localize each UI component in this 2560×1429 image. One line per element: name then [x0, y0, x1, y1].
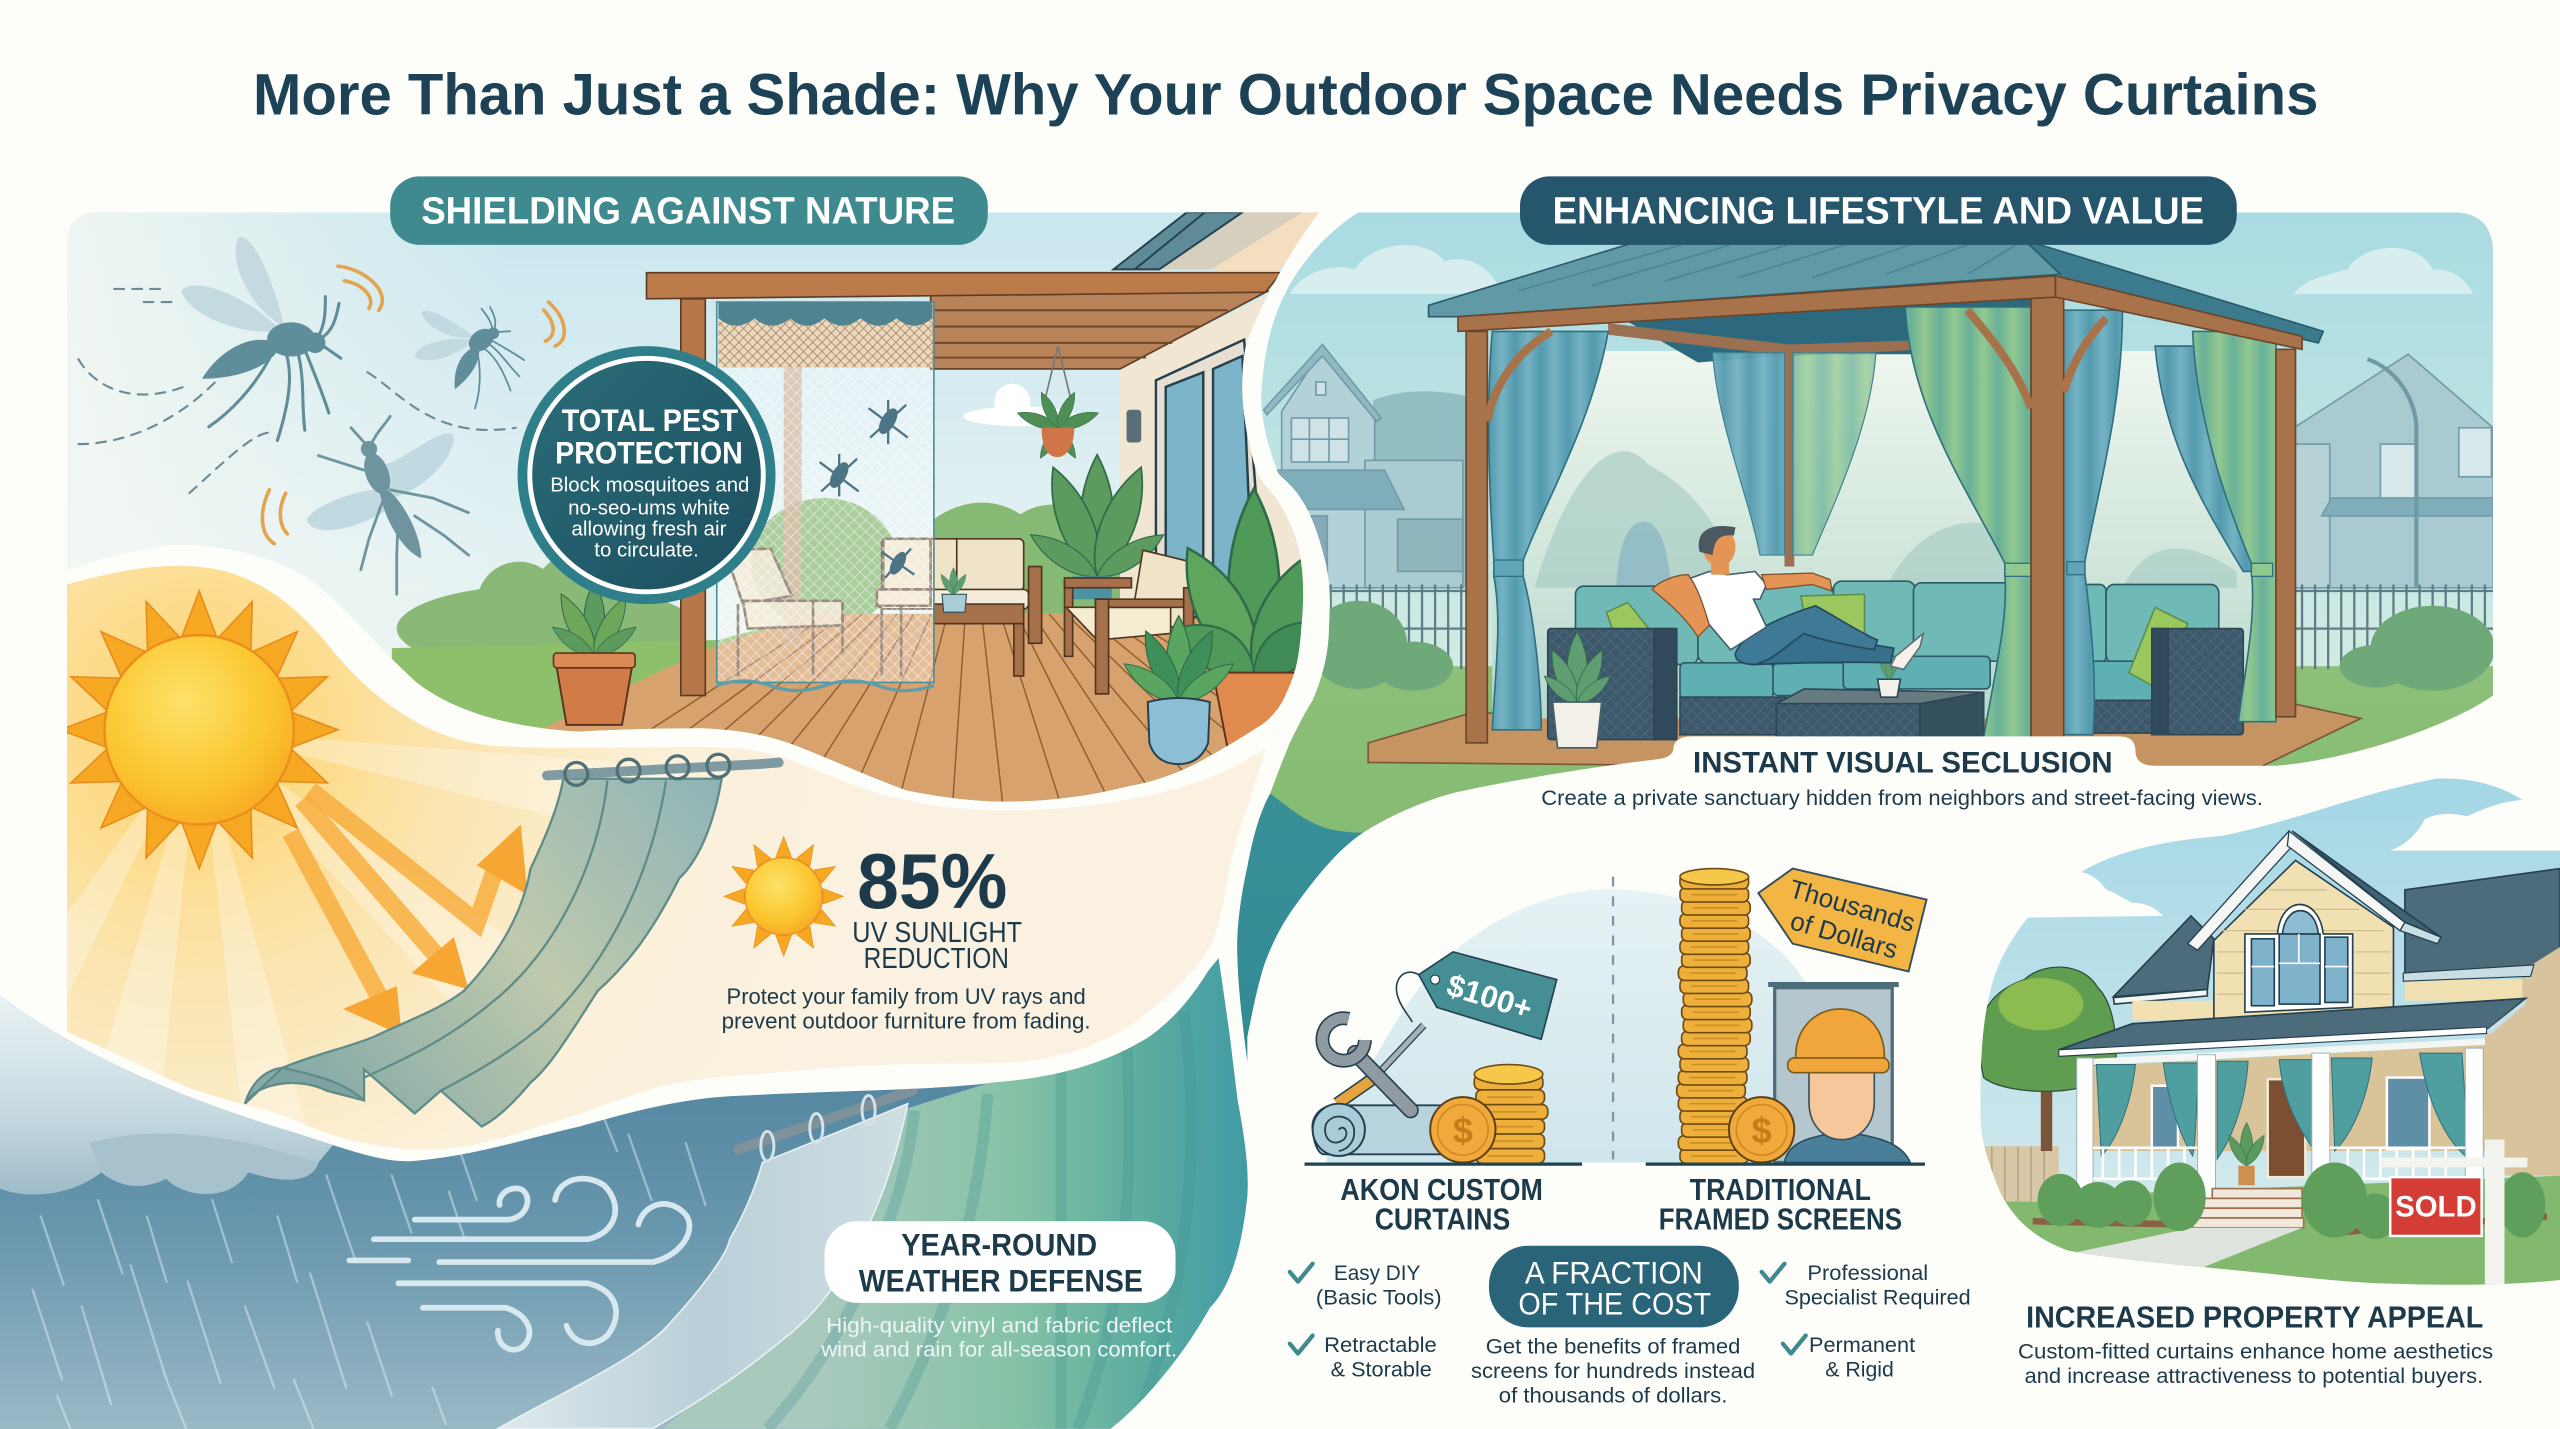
text: instant visual seclusion	[1541, 746, 2263, 810]
large coin beside stack: $	[1752, 1110, 1772, 1151]
fence	[1980, 1146, 2059, 1202]
street lamp	[2367, 359, 2416, 588]
porch wall	[2093, 1045, 2485, 1151]
uv body text	[722, 984, 1091, 1034]
pill: enhancing lifestyle heading: ENHANCING LIFESTYLE AND VALUE	[1553, 190, 2204, 232]
porch roof	[2059, 998, 2526, 1050]
heading: traditional framed screens: FRAMED SCREENS	[1659, 1203, 1902, 1236]
list: traditional features: Professional	[1807, 1262, 1928, 1285]
cost body text	[1471, 1335, 1755, 1407]
man relaxing	[1652, 526, 1923, 669]
sofa wicker base	[1680, 697, 2155, 735]
gable roof right	[2292, 831, 2441, 937]
title: More Than Just a Shade: Why Your Outdoor Space Needs Privacy Curtains	[253, 62, 2318, 127]
heading: akon custom curtains: AKON CUSTOM	[1340, 1174, 1543, 1207]
curtain ties	[1494, 560, 2273, 576]
panel: pest protection scene	[67, 212, 1714, 816]
badge: total pest protection: allowing fresh air	[571, 519, 727, 541]
stat label: UV SUNLIGHT	[852, 917, 1022, 949]
porch beam	[2077, 1038, 2485, 1066]
list: akon features: (Basic Tools)	[1316, 1287, 1442, 1310]
bushes	[397, 555, 697, 673]
weather body text: wind and rain for all-season comfort.	[820, 1339, 1177, 1362]
pill: a fraction of the cost: OF THE COST	[1518, 1286, 1711, 1321]
mosquito 3	[307, 416, 469, 594]
tools	[1312, 1018, 1445, 1156]
panel: weather scene	[0, 947, 1273, 1429]
insects on mesh	[820, 400, 914, 578]
soffit	[1159, 212, 1303, 269]
panel: property appeal scene	[1967, 767, 2560, 1306]
back curtains	[1713, 353, 1876, 555]
panel: cost comparison	[1290, 869, 1971, 1407]
badge: total pest protection: no-seo-ums white	[568, 497, 730, 519]
wicker arms	[1548, 629, 2243, 740]
text: instant visual seclusion: INSTANT VISUAL SECLUSION	[1693, 746, 2113, 779]
checkmarks	[1290, 1264, 1806, 1353]
sliding glass door	[1156, 340, 1265, 617]
plant behind chair	[1025, 455, 1169, 599]
pergola post	[681, 299, 705, 696]
grass	[1216, 666, 2506, 1058]
roof edge	[1113, 212, 1242, 269]
heading: traditional framed screens	[1659, 1174, 1902, 1236]
deck	[531, 614, 1306, 816]
sold sign	[2380, 1140, 2527, 1287]
uv body text: Protect your family from UV rays and	[727, 984, 1086, 1009]
list: akon features: & Storable	[1331, 1358, 1432, 1381]
list: traditional features: & Rigid	[1825, 1358, 1894, 1381]
sun spikes	[60, 591, 338, 869]
weather body text	[820, 1314, 1177, 1362]
heading: akon custom curtains	[1340, 1174, 1543, 1236]
patio sofa	[878, 539, 1042, 643]
shrubs	[2038, 1162, 2545, 1239]
sheer background	[1492, 351, 2276, 718]
background house right	[2291, 354, 2493, 588]
sun disc	[104, 635, 294, 825]
posts	[1466, 297, 2296, 748]
heading: traditional framed screens: TRADITIONAL	[1690, 1174, 1871, 1207]
columns	[2077, 1048, 2483, 1205]
worker with screen frame	[1768, 985, 1910, 1162]
list: akon features: Easy DIY	[1334, 1262, 1420, 1285]
wall lamp	[1127, 410, 1141, 442]
gable trim	[2188, 831, 2441, 950]
price tag: $100+	[1396, 952, 1557, 1039]
cost body text: screens for hundreds instead	[1471, 1360, 1755, 1383]
cost body text: of thousands of dollars.	[1499, 1384, 1727, 1407]
badge: total pest protection	[518, 346, 776, 604]
price tag: thousands of dollars	[1758, 869, 1927, 971]
large plant right	[1166, 488, 1342, 749]
stat label	[852, 917, 1022, 975]
weather pill: WEATHER DEFENSE	[859, 1263, 1143, 1298]
clouds	[1290, 245, 2473, 294]
mosquito 2	[396, 277, 539, 424]
railings	[2093, 1148, 2465, 1179]
text: increased property appeal: and increase attractiveness to potential buyers.	[2024, 1365, 2483, 1388]
divider	[1612, 877, 1614, 1159]
panel: uv sunlight scene	[60, 555, 1291, 1159]
fascia right	[2403, 965, 2534, 981]
beams	[1458, 276, 2302, 349]
sound waves	[262, 266, 564, 544]
light beams	[67, 730, 686, 1143]
stat: 85%: 85%	[857, 837, 1007, 925]
background hill	[1373, 391, 1466, 588]
badge: total pest protection: Block mosquitoes and	[550, 474, 749, 496]
house curtains	[2096, 1053, 2467, 1159]
draped curtain	[245, 779, 722, 1127]
mosquito 1	[181, 237, 341, 440]
badge: total pest protection: TOTAL PEST	[562, 403, 738, 438]
badge: total pest protection: to circulate.	[594, 540, 699, 562]
gable window	[2245, 905, 2353, 1012]
walkway	[2069, 1228, 2302, 1273]
small sun icon	[724, 837, 843, 956]
vinyl panel	[498, 1104, 908, 1429]
panel: cost comparison background	[1247, 696, 2560, 1429]
rain	[33, 1118, 705, 1429]
text: instant visual seclusion: Create a private sanctuary hidden from neighbors and street-facing views.	[1541, 787, 2263, 810]
mulch	[2033, 1216, 2547, 1233]
pergola beam	[647, 273, 1282, 299]
fence	[1324, 584, 2493, 669]
porch plant	[2225, 1123, 2268, 1185]
mini plant on table	[938, 568, 969, 612]
table	[1776, 654, 1984, 738]
cloud	[963, 384, 1078, 426]
ceiling	[1629, 299, 2030, 362]
list: akon features: Retractable	[1324, 1334, 1437, 1357]
weather body text: High-quality vinyl and fabric deflect	[826, 1314, 1172, 1337]
tree	[1977, 967, 2116, 1151]
sofa back cushions	[1576, 581, 2219, 664]
chair right	[1064, 550, 1197, 694]
porch windows	[2152, 1078, 2429, 1149]
platform	[1368, 702, 2361, 771]
flight trails	[78, 289, 516, 493]
teal curtain	[663, 947, 1257, 1429]
upper wall	[1159, 212, 1319, 279]
siding lines	[2217, 890, 2390, 994]
house wall	[1120, 286, 1306, 614]
tall coin stack	[1677, 869, 1752, 1163]
background house left	[1264, 344, 1463, 588]
front gable wall	[2214, 860, 2393, 1025]
stat label: REDUCTION	[864, 943, 1009, 975]
uv body text: prevent outdoor furniture from fading.	[722, 1009, 1091, 1034]
text: increased property appeal: Custom-fitted curtains enhance home aesthetics	[2018, 1340, 2493, 1363]
curtain folds	[767, 1012, 1191, 1429]
heading: akon custom curtains: CURTAINS	[1375, 1203, 1510, 1236]
left side roof	[2113, 916, 2214, 1020]
large coin	[1430, 1097, 1496, 1162]
potted plant at gazebo	[1540, 632, 1614, 748]
blue haze figure behind man	[1616, 522, 1672, 588]
pillows	[1607, 594, 2188, 689]
grass	[392, 614, 1306, 816]
large coin: $	[1453, 1110, 1473, 1151]
sold sign: SOLD	[2395, 1190, 2477, 1223]
dome background	[1326, 889, 1812, 1162]
distant trees through curtain	[1535, 451, 2237, 588]
porch fascia	[2059, 1027, 2487, 1056]
beam braces	[1487, 310, 2106, 421]
cost body text: Get the benefits of framed	[1486, 1335, 1740, 1358]
panel: gazebo scene	[1208, 212, 2506, 1061]
text: increased property appeal	[2018, 1301, 2493, 1388]
bushes	[1309, 601, 2495, 691]
list: akon features	[1316, 1262, 1442, 1381]
sofa seats	[1680, 656, 2155, 700]
teal wave	[1237, 794, 1364, 1061]
curtain rod	[738, 1091, 913, 1161]
hanging planter	[1015, 346, 1101, 461]
pill: a fraction of the cost	[1489, 1246, 1739, 1327]
wind swirls	[349, 1179, 689, 1350]
list: traditional features: Permanent	[1809, 1334, 1915, 1357]
potted plant by post	[548, 582, 640, 725]
list: traditional features	[1784, 1262, 1971, 1381]
back beams	[1608, 324, 1910, 567]
ground lines	[1304, 1163, 1925, 1165]
price tag: $100+: $100+	[1443, 967, 1536, 1026]
large coin beside stack	[1729, 1097, 1794, 1162]
door	[2268, 1079, 2305, 1177]
price tag: thousands of dollars: Thousands	[1786, 873, 1919, 938]
weather pill	[824, 1221, 1176, 1303]
weather pill: YEAR-ROUND	[901, 1228, 1097, 1263]
small coin stack	[1474, 1065, 1548, 1163]
cream band right	[2405, 980, 2522, 1001]
text: increased property appeal: INCREASED PROPERTY APPEAL	[2026, 1301, 2483, 1334]
list: traditional features: Specialist Required	[1784, 1287, 1971, 1310]
pergola slats	[931, 291, 1269, 369]
left chairs in mesh	[725, 539, 931, 676]
right siding	[2485, 947, 2560, 1176]
mesh curtain	[717, 302, 934, 691]
orange arrows	[291, 790, 500, 996]
deck planks	[516, 522, 1714, 816]
blue pot plant	[1119, 616, 1239, 764]
storm cloud	[0, 980, 335, 1195]
front curtains	[1489, 307, 2276, 738]
pill: a fraction of the cost: A FRACTION	[1525, 1255, 1703, 1290]
price tag: thousands of dollars: of Dollars	[1787, 905, 1901, 965]
pill: shielding heading: SHIELDING AGAINST NATURE	[421, 190, 955, 232]
coffee table	[934, 604, 1024, 676]
roof	[1429, 240, 2323, 343]
lawn	[1967, 1176, 2560, 1306]
badge: total pest protection: PROTECTION	[555, 436, 743, 471]
pill: shielding heading	[390, 176, 988, 245]
pill: enhancing lifestyle heading	[1520, 176, 2237, 245]
steps	[2193, 1189, 2304, 1228]
curtain rod	[547, 754, 779, 785]
right roof	[2405, 869, 2560, 973]
